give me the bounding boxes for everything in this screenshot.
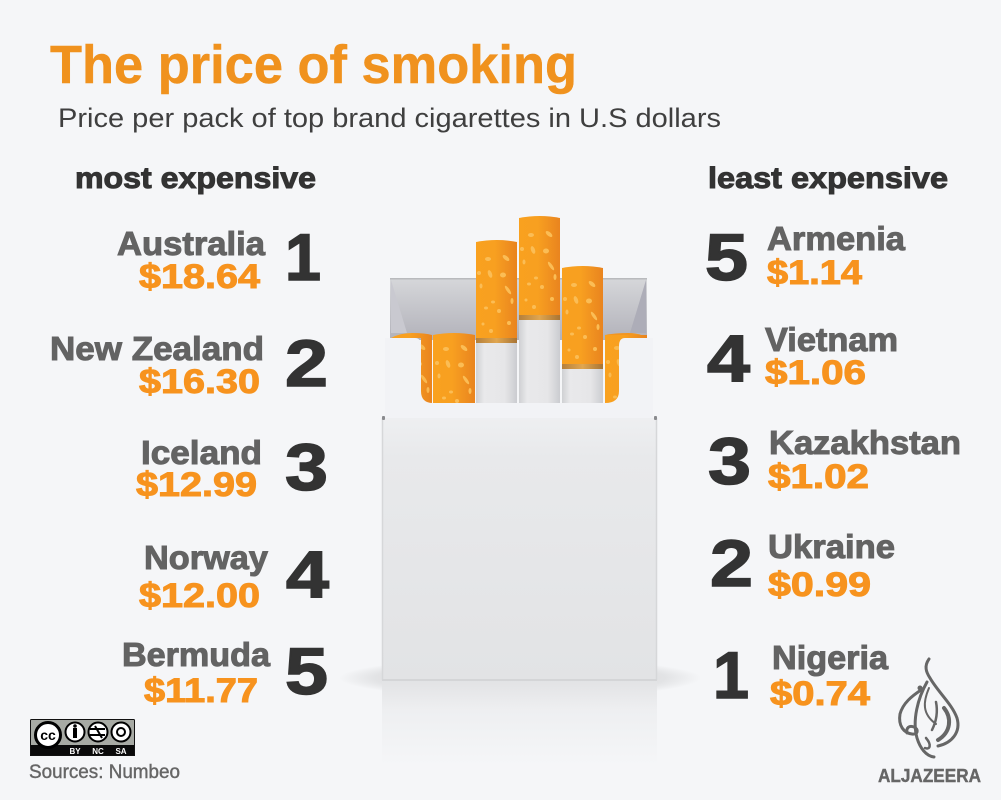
- rank 2 New Zealand: 2: [285, 326, 328, 400]
- pack inner back: [390, 278, 647, 340]
- CC BY-NC-SA badge: cc: [40, 727, 56, 743]
- rank 1 Nigeria: Nigeria: [772, 639, 889, 676]
- rank 3 Iceland: [136, 430, 328, 504]
- sources: Sources: Numbeo: [29, 762, 180, 783]
- cigarette: right: [562, 266, 603, 403]
- rank 1 Australia: $18.64: [139, 258, 260, 296]
- pack notches: [382, 416, 657, 420]
- rank 5 Armenia: [705, 220, 906, 294]
- cigarette: short filter: [433, 333, 475, 423]
- pack reflection: [382, 681, 657, 766]
- heading: least expensive: least expensive: [708, 162, 948, 195]
- rank 1 Australia: 1: [285, 220, 321, 294]
- pack front edges: [382, 418, 656, 680]
- rank 4 Vietnam: 4: [707, 321, 750, 395]
- cigarette: tall left: [476, 240, 517, 403]
- rank 1 Nigeria: [713, 638, 889, 713]
- rank 3 Iceland: 3: [285, 430, 328, 504]
- pack front: [382, 418, 657, 680]
- rank 2 Ukraine: 2: [710, 526, 753, 600]
- rank 5 Armenia: 5: [705, 220, 748, 294]
- cigarette pack illustration: [339, 216, 701, 766]
- rank 4 Vietnam: Vietnam: [765, 321, 898, 358]
- Al Jazeera logo: [878, 659, 981, 786]
- rank 1 Nigeria: 1: [713, 638, 749, 712]
- rank 4 Norway: Norway: [144, 539, 269, 576]
- rank 1 Australia: Australia: [117, 225, 266, 262]
- rank 4 Norway: $12.00: [139, 577, 260, 615]
- most expensive list: [50, 220, 329, 710]
- rank 5 Bermuda: Bermuda: [122, 636, 271, 673]
- rank 3 Kazakhstan: [708, 424, 961, 498]
- logo mark: [900, 659, 958, 757]
- rank 5 Bermuda: $11.77: [144, 672, 258, 710]
- rank 2 Ukraine: Ukraine: [768, 528, 895, 565]
- rank 2 New Zealand: New Zealand: [50, 330, 264, 367]
- rank 2 Ukraine: [710, 526, 895, 604]
- rank 3 Kazakhstan: $1.02: [768, 458, 869, 496]
- rank 3 Kazakhstan: 3: [708, 424, 751, 498]
- heading: most expensive: most expensive: [75, 162, 316, 195]
- CC BY-NC-SA badge: SA: [115, 747, 127, 756]
- rank 2 New Zealand: $16.30: [139, 363, 260, 401]
- rank 3 Iceland: $12.99: [136, 466, 257, 504]
- rank 5 Bermuda: [122, 634, 328, 710]
- rank 2 Ukraine: $0.99: [768, 566, 871, 604]
- rank 5 Armenia: Armenia: [767, 220, 906, 257]
- title: The price of smoking: [50, 35, 577, 95]
- CC BY-NC-SA badge: NC: [92, 747, 104, 756]
- cigarette: tallest centre: [519, 216, 560, 403]
- rank 5 Armenia: $1.14: [767, 254, 862, 292]
- cigarette: right partial: [605, 333, 647, 422]
- rank 4 Vietnam: [707, 321, 898, 395]
- CC BY-NC-SA badge: BY: [69, 747, 81, 756]
- logo wordmark: ALJAZEERA: [878, 766, 981, 786]
- least expensive list: [705, 220, 961, 713]
- rank 3 Iceland: Iceland: [141, 434, 262, 471]
- rank 4 Vietnam: $1.06: [765, 354, 866, 392]
- rank 3 Kazakhstan: Kazakhstan: [769, 424, 961, 461]
- subtitle: Price per pack of top brand cigarettes in U.S dollars: [58, 103, 721, 133]
- CC BY-NC-SA badge: [30, 719, 135, 756]
- rank 2 New Zealand: [50, 326, 328, 401]
- rank 4 Norway: [139, 537, 329, 615]
- pack shadow: [339, 658, 701, 698]
- rank 1 Australia: [117, 220, 321, 296]
- cigarette: left partial: [391, 333, 432, 422]
- rank 1 Nigeria: $0.74: [770, 675, 870, 713]
- rank 4 Norway: 4: [286, 537, 329, 611]
- rank 5 Bermuda: 5: [285, 634, 328, 708]
- pack front flap: [385, 338, 653, 418]
